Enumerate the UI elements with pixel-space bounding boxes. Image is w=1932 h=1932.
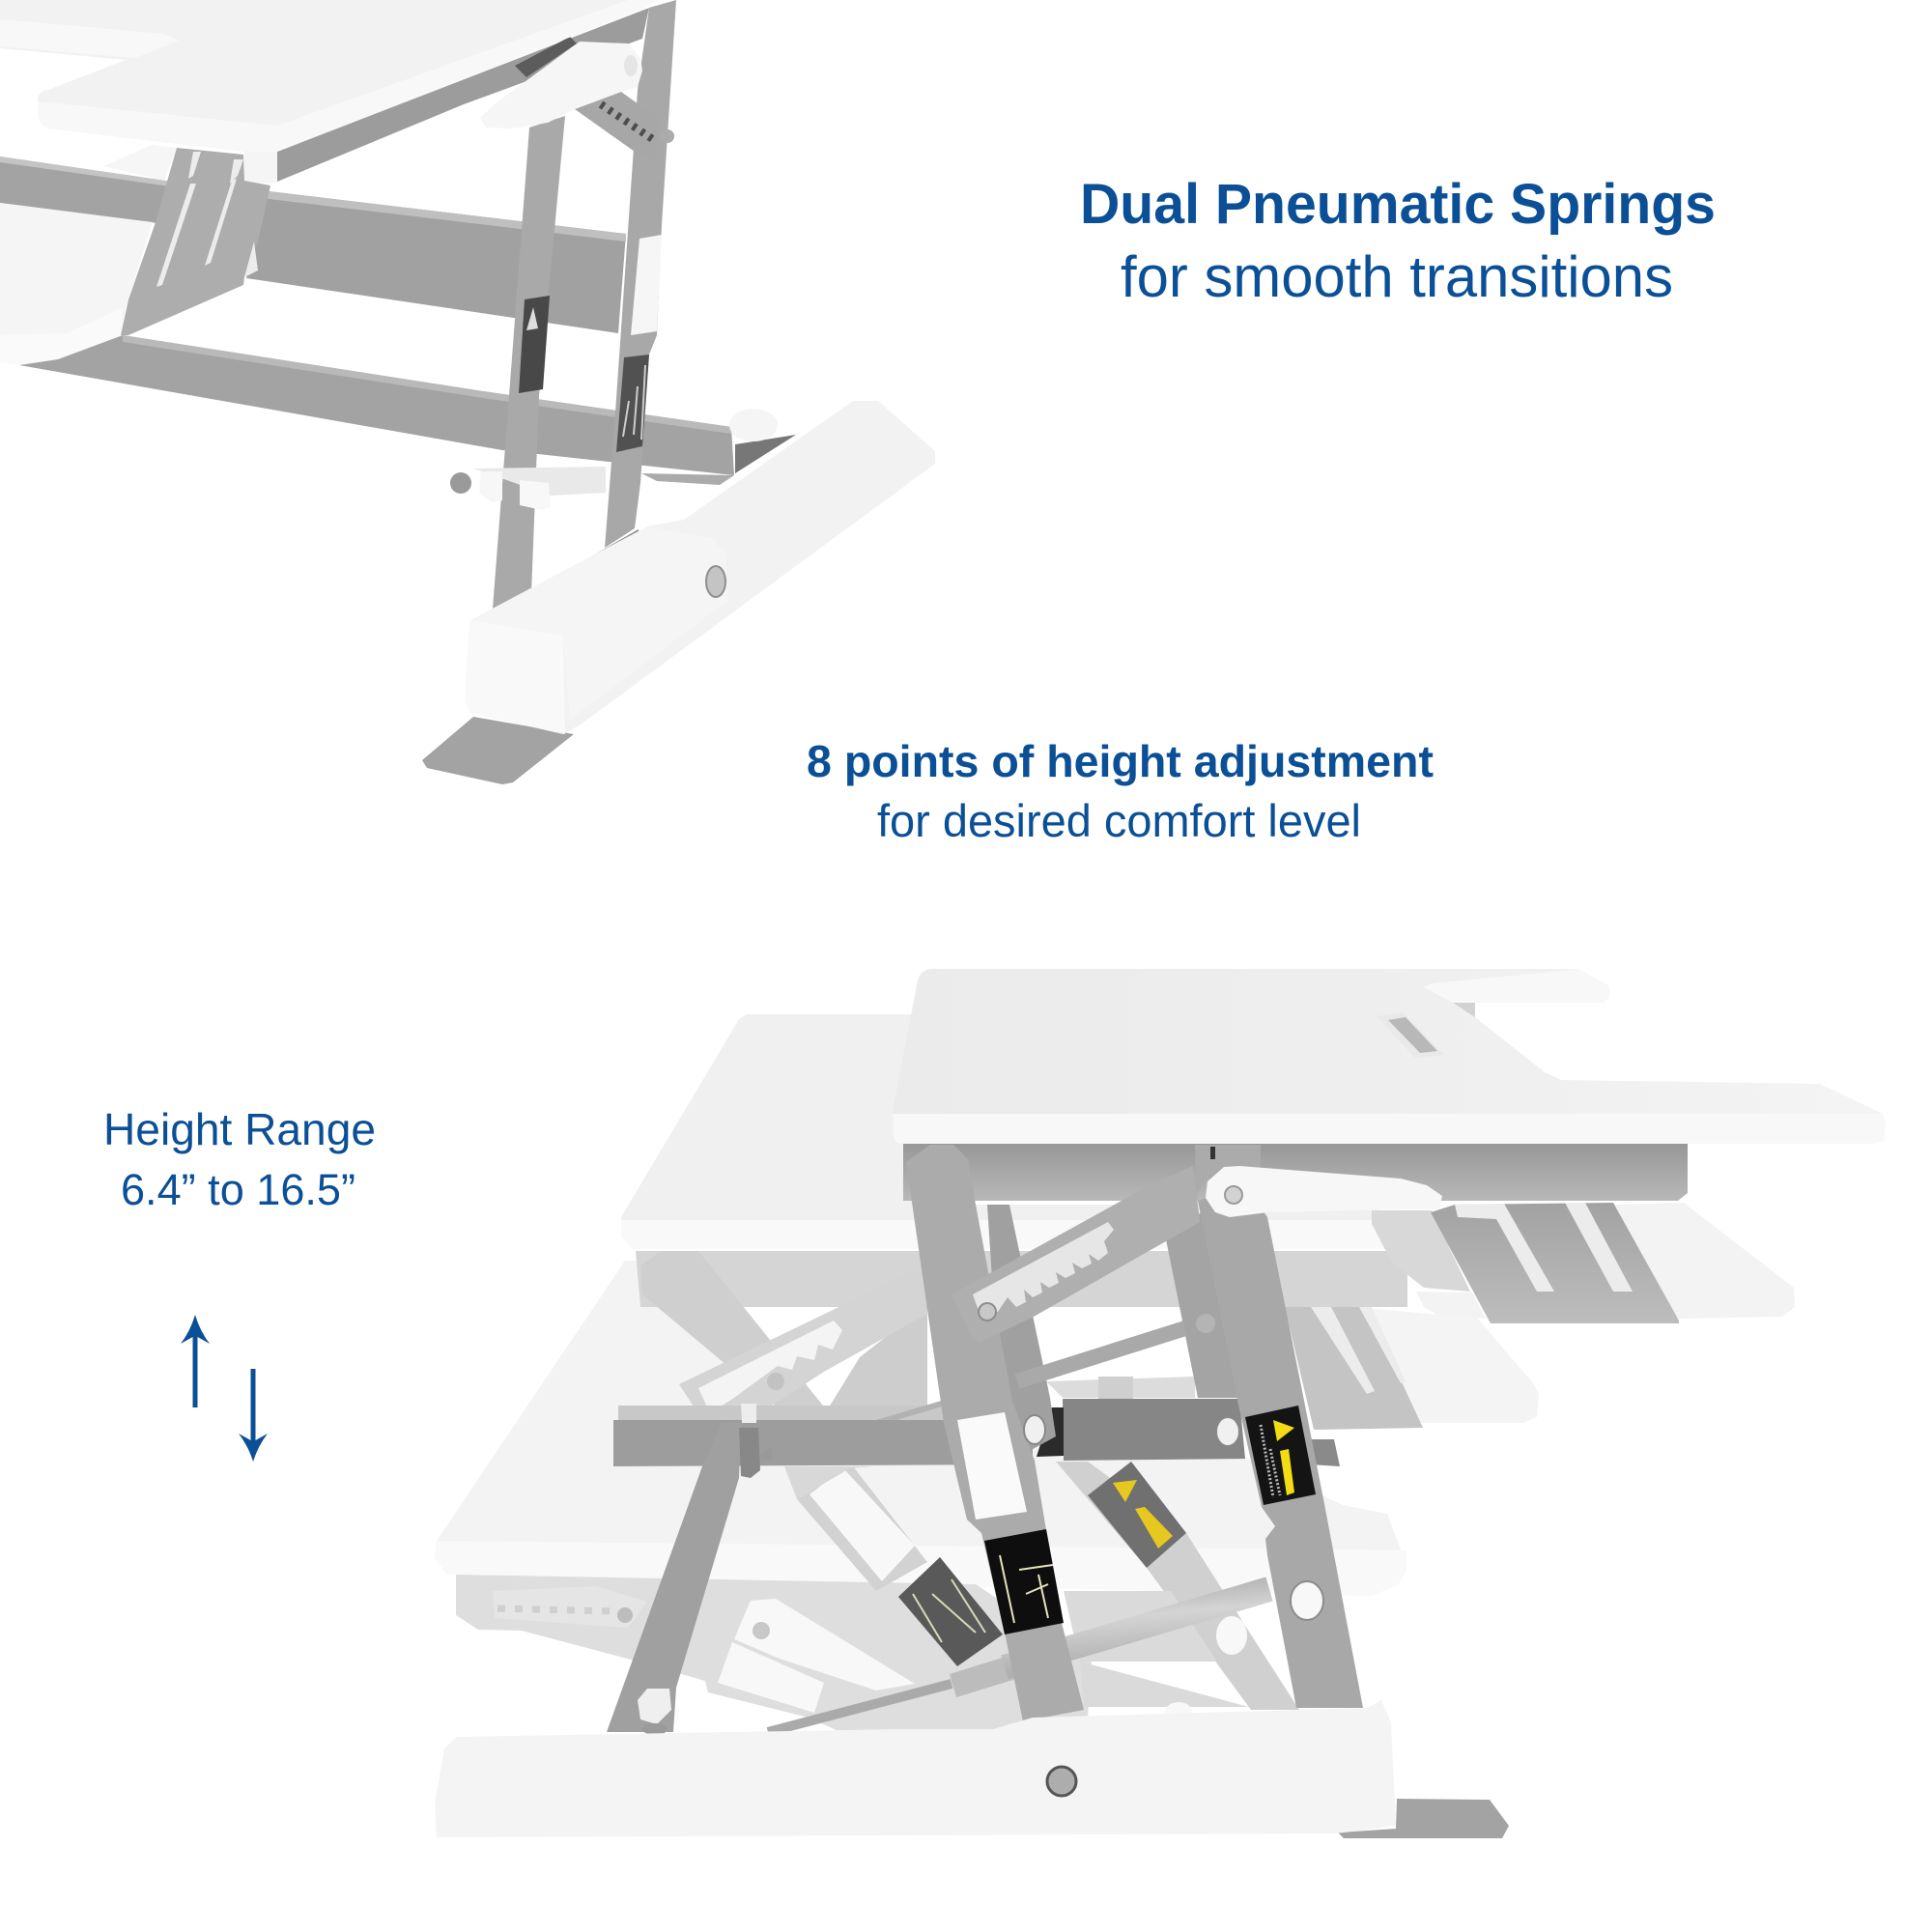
middle desk surface: [621, 1014, 1396, 1249]
ghost clip: [1098, 1377, 1133, 1420]
bracket slots at foot: [529, 529, 639, 599]
notch shade: [1453, 1003, 1475, 1017]
desk front edge: [38, 0, 659, 152]
icon: up arrow: [181, 1315, 210, 1407]
lower spring collar: [950, 1656, 1016, 1697]
toothed adjuster plate: [575, 92, 659, 162]
rear beam end: [1285, 1439, 1340, 1466]
top desk: [893, 969, 1886, 1144]
ghost diagram label: [898, 1557, 1003, 1666]
foot cap: [470, 526, 727, 720]
underside strut: [277, 5, 657, 182]
base foot plate: [1338, 1799, 1509, 1838]
handle bolt: [1225, 1186, 1242, 1204]
arm clamp: [739, 1428, 760, 1478]
arm bolt: [642, 1723, 668, 1735]
warning label: [519, 296, 550, 393]
middle tray slots: [1311, 1307, 1406, 1394]
foot rail: [465, 401, 935, 734]
centre beam: [613, 1420, 1033, 1466]
plastic bracket: [244, 152, 277, 184]
adjuster bolt: [979, 1303, 996, 1321]
ghost warning stripe: [1135, 1507, 1173, 1548]
ghost window: [810, 1468, 915, 1581]
plate slots: [156, 152, 258, 287]
middle underside band: [636, 1251, 1407, 1307]
ghost plate bolt: [767, 1373, 784, 1390]
upper cross beam right: [246, 190, 626, 333]
base hidden bolt: [1165, 1702, 1192, 1721]
pivot bracket: [1195, 1145, 1261, 1195]
ghost plate slot: [698, 1321, 842, 1413]
end knob: [729, 409, 796, 473]
handle: [480, 42, 642, 128]
pivot dots: [1210, 1147, 1215, 1159]
lower gas spring: [1005, 1589, 1269, 1667]
ghost label lines: [913, 1579, 985, 1642]
spring coil under desk: [515, 37, 577, 77]
lower beam highlight: [123, 335, 731, 434]
upper beam right highlight: [261, 190, 626, 242]
finger highlight: [1424, 969, 1609, 1003]
ghost strip behind spring: [1046, 1377, 1195, 1398]
adjuster teeth: [601, 104, 654, 140]
warning stripe: [1280, 1449, 1294, 1495]
desk top surface: [0, 0, 659, 152]
value: 6.4” to 16.5”: [121, 1165, 355, 1214]
top desk front edge: [893, 1114, 1886, 1144]
pivot left: [1024, 1415, 1045, 1444]
label triangle: [526, 307, 538, 330]
middle desk front edge: [621, 1220, 1396, 1249]
subheading: for desired comfort level: [877, 795, 1361, 846]
ghost warning triangle: [1113, 1480, 1137, 1502]
upper finger: [0, 19, 179, 58]
pivot right: [1216, 1417, 1239, 1446]
top tray plate: [1431, 1203, 1679, 1323]
text block: height adjustment points: [807, 736, 1434, 846]
ghost teeth bolt: [617, 1607, 633, 1623]
under-top metal box: [903, 1143, 1688, 1201]
warning triangle: [1273, 1420, 1294, 1441]
ghost lower wedge: [1064, 1591, 1249, 1707]
foot plate: [422, 717, 574, 784]
handle hole: [624, 55, 638, 76]
white base rail: [435, 1700, 1396, 1837]
icon: down arrow: [239, 1369, 268, 1462]
ghost warning label: [1088, 1462, 1186, 1568]
adjuster bolt: [661, 129, 674, 143]
warning label: [1245, 1406, 1316, 1505]
middle tray plate: [1285, 1307, 1423, 1430]
upper beam left highlight: [0, 156, 172, 186]
keyboard tray: [0, 203, 153, 365]
upper cross beam left: [0, 156, 172, 223]
ghost scissor arm: [640, 1251, 831, 1420]
front bolt: [1291, 1581, 1323, 1620]
foot bolt: [706, 566, 725, 597]
diagram label: [984, 1529, 1064, 1634]
tray slot plate: [121, 148, 270, 335]
photo: close-up of riser leg and foot: [0, 0, 935, 784]
ghost teeth plate: [493, 1586, 647, 1628]
cable slot frame: [1377, 1012, 1444, 1058]
slider pad: [631, 235, 662, 335]
tray ghost shade: [1372, 1210, 1470, 1292]
ghost post: [824, 1304, 927, 1415]
warning text lines: [1261, 1425, 1280, 1497]
lower rod: [768, 1684, 952, 1732]
text block: height range: [103, 1104, 376, 1214]
ghost pin: [741, 1404, 756, 1423]
cable slot: [1388, 1017, 1437, 1053]
top tray surface: [1416, 1203, 1795, 1319]
right main leg: [1198, 1186, 1363, 1708]
diagram label: [616, 355, 649, 452]
handle: [1206, 1166, 1442, 1217]
adjuster slot: [973, 1222, 1114, 1312]
upper spring fitting: [1196, 1314, 1215, 1333]
middle keyboard tray: [1348, 1306, 1539, 1423]
lowest desk surface: [435, 1261, 1406, 1596]
left main leg: [906, 1145, 1084, 1721]
keyboard tray edge: [0, 307, 123, 365]
ghost lower pad: [718, 1642, 824, 1713]
ghost lower handle: [734, 1599, 915, 1690]
ghost plate with window: [797, 1466, 927, 1591]
rod fitting: [760, 1447, 773, 1462]
heading: Dual Pneumatic Springs: [1080, 173, 1716, 236]
ghost handle bolt: [753, 1622, 770, 1639]
right leg: [605, 0, 676, 548]
photo: standing desk riser at three heights: [435, 969, 1886, 1838]
upper gas spring: [1017, 1328, 1185, 1381]
white pad: [957, 1412, 1027, 1520]
ghost upper arm: [784, 1466, 874, 1499]
diagram label lines: [1000, 1555, 1053, 1623]
tray rear surface: [103, 145, 177, 181]
arm pin: [638, 1689, 671, 1724]
gas spring fitting: [450, 467, 734, 510]
centre dark box: [1063, 1399, 1245, 1461]
rear post right: [1166, 1208, 1241, 1398]
rear post left: [987, 1205, 1056, 1454]
lowest underside ghost: [456, 1575, 1092, 1732]
rear bolt: [1216, 1616, 1247, 1655]
base bolt: [1047, 1767, 1076, 1796]
left leg: [492, 116, 565, 621]
subheading: for smooth transitions: [1121, 244, 1673, 309]
lowest desk front edge: [435, 1541, 1406, 1596]
label: Height Range: [103, 1104, 376, 1154]
heading: 8 points of height adjustment: [807, 736, 1434, 786]
ghost arm right: [1056, 1462, 1299, 1710]
adjuster plate: [952, 1166, 1200, 1343]
ghost top beam: [618, 1406, 956, 1420]
foot end face: [465, 620, 565, 734]
ghost teeth: [497, 1608, 613, 1611]
box shadow gap: [1037, 1407, 1064, 1457]
diagonal arm: [607, 1423, 741, 1732]
lower cross beam: [19, 335, 734, 475]
title: dual pneumatic springs: [1080, 173, 1716, 309]
diagram label lines: [623, 365, 645, 440]
thin gas rod: [773, 1401, 952, 1454]
ghost adjuster plate: [679, 1268, 927, 1420]
tray plate slots: [1455, 1203, 1633, 1292]
